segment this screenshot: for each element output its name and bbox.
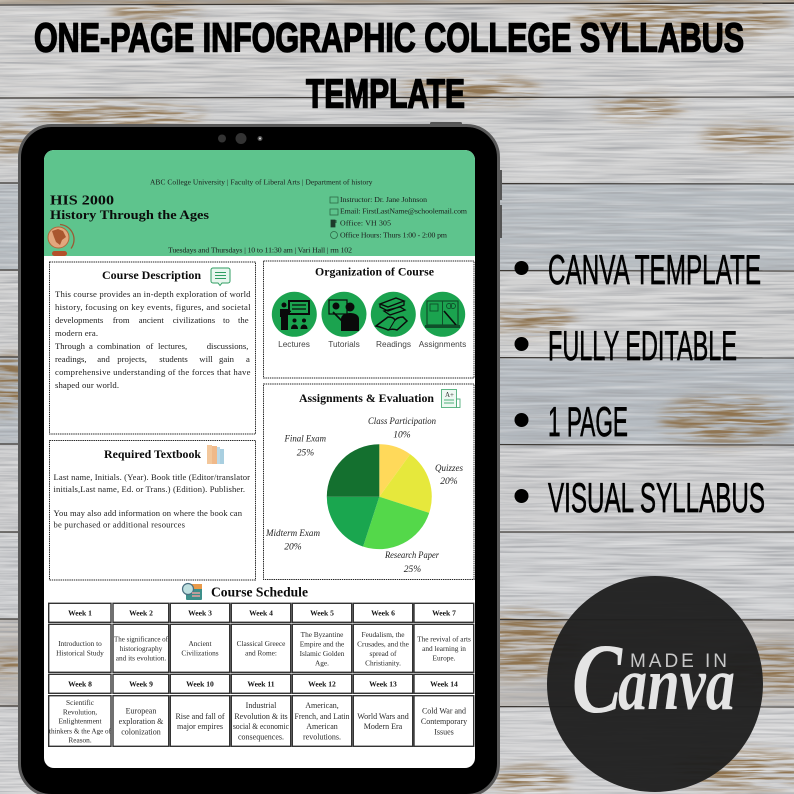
row 1 topics: and Rome: [245, 648, 277, 658]
panel: course schedule [49, 584, 474, 746]
row 1 headers [49, 603, 474, 622]
instructor details: Office: VH 305 [340, 218, 391, 228]
description text: lectures, [158, 341, 187, 351]
row 2 topics: Contemporary [421, 717, 467, 726]
row 1 topics: Europe. [433, 654, 456, 662]
row 1 topics: Feudalism, the [362, 630, 404, 639]
row 1 topics: The Byzantine [301, 630, 343, 639]
row 2 topics: major empires [177, 722, 223, 731]
labels: Assignments [419, 339, 466, 349]
icon: graded paper: A+ [445, 391, 454, 399]
icon: books [207, 445, 224, 464]
row 1 topics [49, 624, 474, 672]
row 1 topics: Civilizations [181, 648, 219, 658]
citation text: be purchased or additional resources [54, 520, 186, 530]
made in canva badge: MADE IN [630, 651, 727, 672]
description text: combination [97, 341, 141, 351]
pie labels: Quizzes [435, 463, 463, 473]
instructor details [330, 195, 467, 240]
description text [55, 289, 251, 390]
week grid [49, 603, 474, 746]
row 1 topics: and learning in [422, 644, 466, 653]
row 1 topics: spread of [370, 649, 397, 658]
row 2 headers: Week 11 [247, 680, 275, 688]
description text: and [97, 354, 110, 364]
description text: a [246, 354, 250, 364]
row 1 topics: Age. [315, 658, 329, 668]
row 2 topics: Reason. [68, 736, 92, 745]
row 1 headers: Week 2 [129, 608, 153, 618]
row 2 topics: Issues [434, 728, 454, 736]
description text: civilizations [173, 315, 216, 325]
description text: comprehensive understanding of the forces that have [55, 367, 251, 377]
made in canva badge: anva [618, 642, 735, 726]
row 2 topics: American, [305, 701, 339, 710]
heading: Course Schedule [211, 584, 308, 600]
row 2 topics: European [126, 706, 156, 716]
icon: graded paper [442, 390, 460, 408]
description text: modern era. [55, 328, 98, 338]
description text: shaped our world. [55, 380, 119, 390]
row 1 topics: Empire and the [300, 640, 344, 648]
bullet: 1 page: 1 PAGE [548, 398, 628, 445]
made in canva badge: C [572, 623, 623, 734]
row 2 headers [49, 674, 474, 693]
title: TEMPLATE [306, 70, 465, 116]
panel: assignments and evaluation [264, 384, 474, 580]
row 1 headers: Week 6 [371, 608, 395, 618]
citation text: initials,Last name, Ed. or Trans.) (Edition). Publisher. [54, 484, 245, 494]
icon: assignments [420, 292, 465, 337]
pie labels: 25% [404, 565, 421, 575]
citation text: Last name, Initials. (Year). Book title (Editor/translator [54, 472, 250, 482]
heading: Assignments & Evaluation [299, 393, 435, 405]
icon: clock and calendar [182, 584, 202, 600]
row 2 topics: Industrial [246, 701, 277, 710]
row 1 topics: and its evolution. [116, 654, 166, 662]
row 1 headers: Week 3 [188, 608, 212, 618]
citation text [54, 472, 250, 530]
icon: globe [48, 224, 74, 256]
heading: Organization of Course [315, 266, 434, 278]
row 1 headers: Week 7 [432, 608, 456, 618]
row 2 topics: World Wars and [357, 712, 409, 721]
description text: a [89, 341, 93, 351]
description text: history, focusing on key events, figures, and societal [55, 302, 251, 312]
row 2 topics: Revolution & its [234, 712, 288, 721]
bullet: 1 page [514, 398, 628, 445]
course title [50, 194, 209, 222]
pie labels: Midterm Exam [265, 528, 320, 538]
row 2 headers: Week 10 [186, 680, 214, 688]
row 2 headers: Week 13 [369, 680, 397, 688]
row 2 topics: Revolution, [63, 707, 97, 716]
instructor details: Office Hours: Thurs 1:00 - 2:00 pm [340, 230, 447, 240]
course title: HIS 2000 [50, 194, 114, 208]
row 2 topics: Modern Era [364, 722, 403, 731]
instructor details: Email: FirstLastName@schoolemail.com [340, 206, 467, 216]
title [34, 14, 744, 116]
description text: ancient [139, 315, 164, 325]
description text: discussions, [207, 341, 248, 351]
labels: Readings [376, 339, 411, 349]
row 1 topics: Crusades, and the [357, 640, 409, 648]
description text: will [199, 354, 213, 364]
row 1 topics: The revival of arts [417, 634, 471, 644]
pie labels [265, 416, 463, 575]
tablet frame [20, 122, 502, 794]
row 2 topics: Cold War and [422, 706, 466, 716]
citation text: You may also add information on where the book can [54, 508, 243, 518]
pie labels: Class Participation [368, 416, 436, 426]
row 2 topics: American [306, 722, 338, 731]
labels [278, 339, 466, 349]
row 2 topics: Enlightenment [59, 717, 101, 726]
row 1 topics: Ancient [188, 639, 212, 648]
description text: to [223, 315, 230, 325]
description text: developments [55, 315, 104, 325]
row 1 topics: Historical Study [56, 648, 104, 658]
panel: required textbook [50, 440, 256, 580]
labels: Tutorials [328, 339, 360, 349]
row 2 topics: revolutions. [303, 732, 341, 742]
bullet list [514, 246, 765, 521]
description text: readings, [55, 354, 87, 364]
description text: projects, [117, 354, 147, 364]
row 2 topics: consequences. [238, 732, 284, 742]
panel: course description [50, 262, 256, 434]
header band [44, 150, 475, 256]
description text: students [159, 354, 188, 364]
description text: This course provides an in-depth exploration of world [55, 289, 251, 299]
pie chart [327, 444, 432, 549]
row 1 topics: historiography [120, 644, 163, 653]
row 2 topics: Scientific [66, 698, 95, 707]
description text: of [146, 341, 153, 351]
instructor details: Instructor: Dr. Jane Johnson [340, 195, 427, 204]
made in canva badge [547, 576, 763, 792]
course title: History Through the Ages [50, 207, 209, 222]
row 2 headers: Week 9 [129, 680, 153, 688]
row 1 topics: Classical Greece [237, 639, 285, 648]
row 1 topics: Islamic Golden [300, 649, 345, 658]
description text: Through [55, 341, 86, 351]
row 2 topics: exploration & [119, 717, 164, 726]
row 2 headers: Week 8 [68, 680, 92, 688]
row 2 topics: Rise and fall of [175, 712, 225, 721]
row 2 headers: Week 14 [430, 680, 458, 688]
icon: lectures [272, 292, 317, 337]
bullet: fully editable [514, 322, 737, 369]
description text: the [238, 315, 249, 325]
row 1 topics: The significance of [114, 634, 169, 644]
institution line: ABC College University | Faculty of Liberal Arts | Department of history [150, 178, 373, 186]
row 2 topics: French, and Latin [294, 712, 350, 721]
description text: from [113, 315, 130, 325]
pie labels: 20% [440, 477, 458, 487]
pie labels: 20% [284, 542, 302, 552]
labels: Lectures [278, 339, 310, 349]
heading: Course Description [102, 268, 201, 282]
icon: speech bubble [211, 268, 230, 286]
row 2 topics: colonization [121, 728, 161, 736]
meeting time line: Tuesdays and Thursdays | 10 to 11:30 am | Vari Hall | rm 102 [168, 246, 352, 254]
row 1 headers: Week 1 [68, 608, 92, 618]
row 2 topics [49, 696, 474, 746]
row 2 topics: thinkers & the Age of [49, 726, 112, 735]
row 1 topics: Christianity. [365, 658, 401, 668]
row 1 topics: Introduction to [58, 639, 102, 648]
row 2 headers: Week 12 [308, 680, 336, 688]
icon: tutorials [322, 292, 366, 337]
tablet screen [44, 150, 475, 768]
pie labels: 10% [393, 430, 411, 440]
pie labels: 25% [297, 448, 314, 458]
camera dots [218, 133, 262, 144]
icon: readings [371, 292, 416, 337]
row 1 headers: Week 4 [249, 608, 273, 618]
heading: Required Textbook [104, 447, 201, 461]
panel: organization of course [264, 261, 474, 378]
description text: gain [219, 354, 235, 364]
row 1 headers: Week 5 [310, 608, 334, 618]
row 2 topics: social & economic [233, 722, 289, 731]
pie labels: Final Exam [284, 434, 326, 444]
pie labels: Research Paper [384, 550, 439, 560]
